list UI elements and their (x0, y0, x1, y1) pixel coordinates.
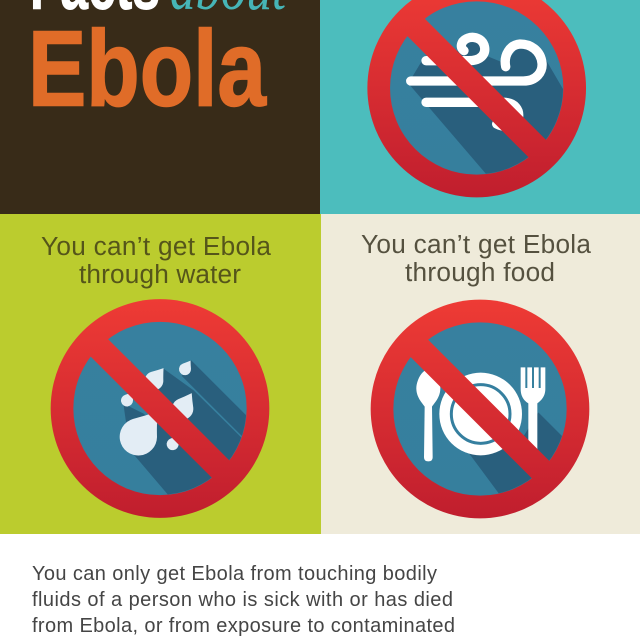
panel: water background (0, 214, 321, 534)
spoon (416, 369, 440, 461)
panel: food background (321, 214, 640, 534)
panel: air background (320, 0, 640, 214)
title: Ebola: Ebola (28, 8, 267, 128)
icon: no water (51, 299, 273, 518)
text block: body (32, 563, 455, 637)
icon: no wind (367, 0, 586, 197)
heading: water: You can’t get Ebola (41, 231, 271, 261)
text block: body: fluids of a person who is sick with or has died (32, 589, 453, 611)
heading: water: through water (79, 259, 241, 289)
plate (439, 373, 522, 455)
heading: water (41, 231, 271, 289)
heading: food: You can’t get Ebola (361, 229, 591, 259)
heading: food (361, 229, 591, 287)
icon: no food (371, 300, 589, 518)
text block: body: You can only get Ebola from touching bodily (32, 563, 437, 585)
panel: title background (0, 0, 320, 214)
text block: body: from Ebola, or from exposure to contaminated (32, 615, 455, 637)
fork (521, 367, 545, 451)
heading: food: through food (405, 257, 555, 287)
